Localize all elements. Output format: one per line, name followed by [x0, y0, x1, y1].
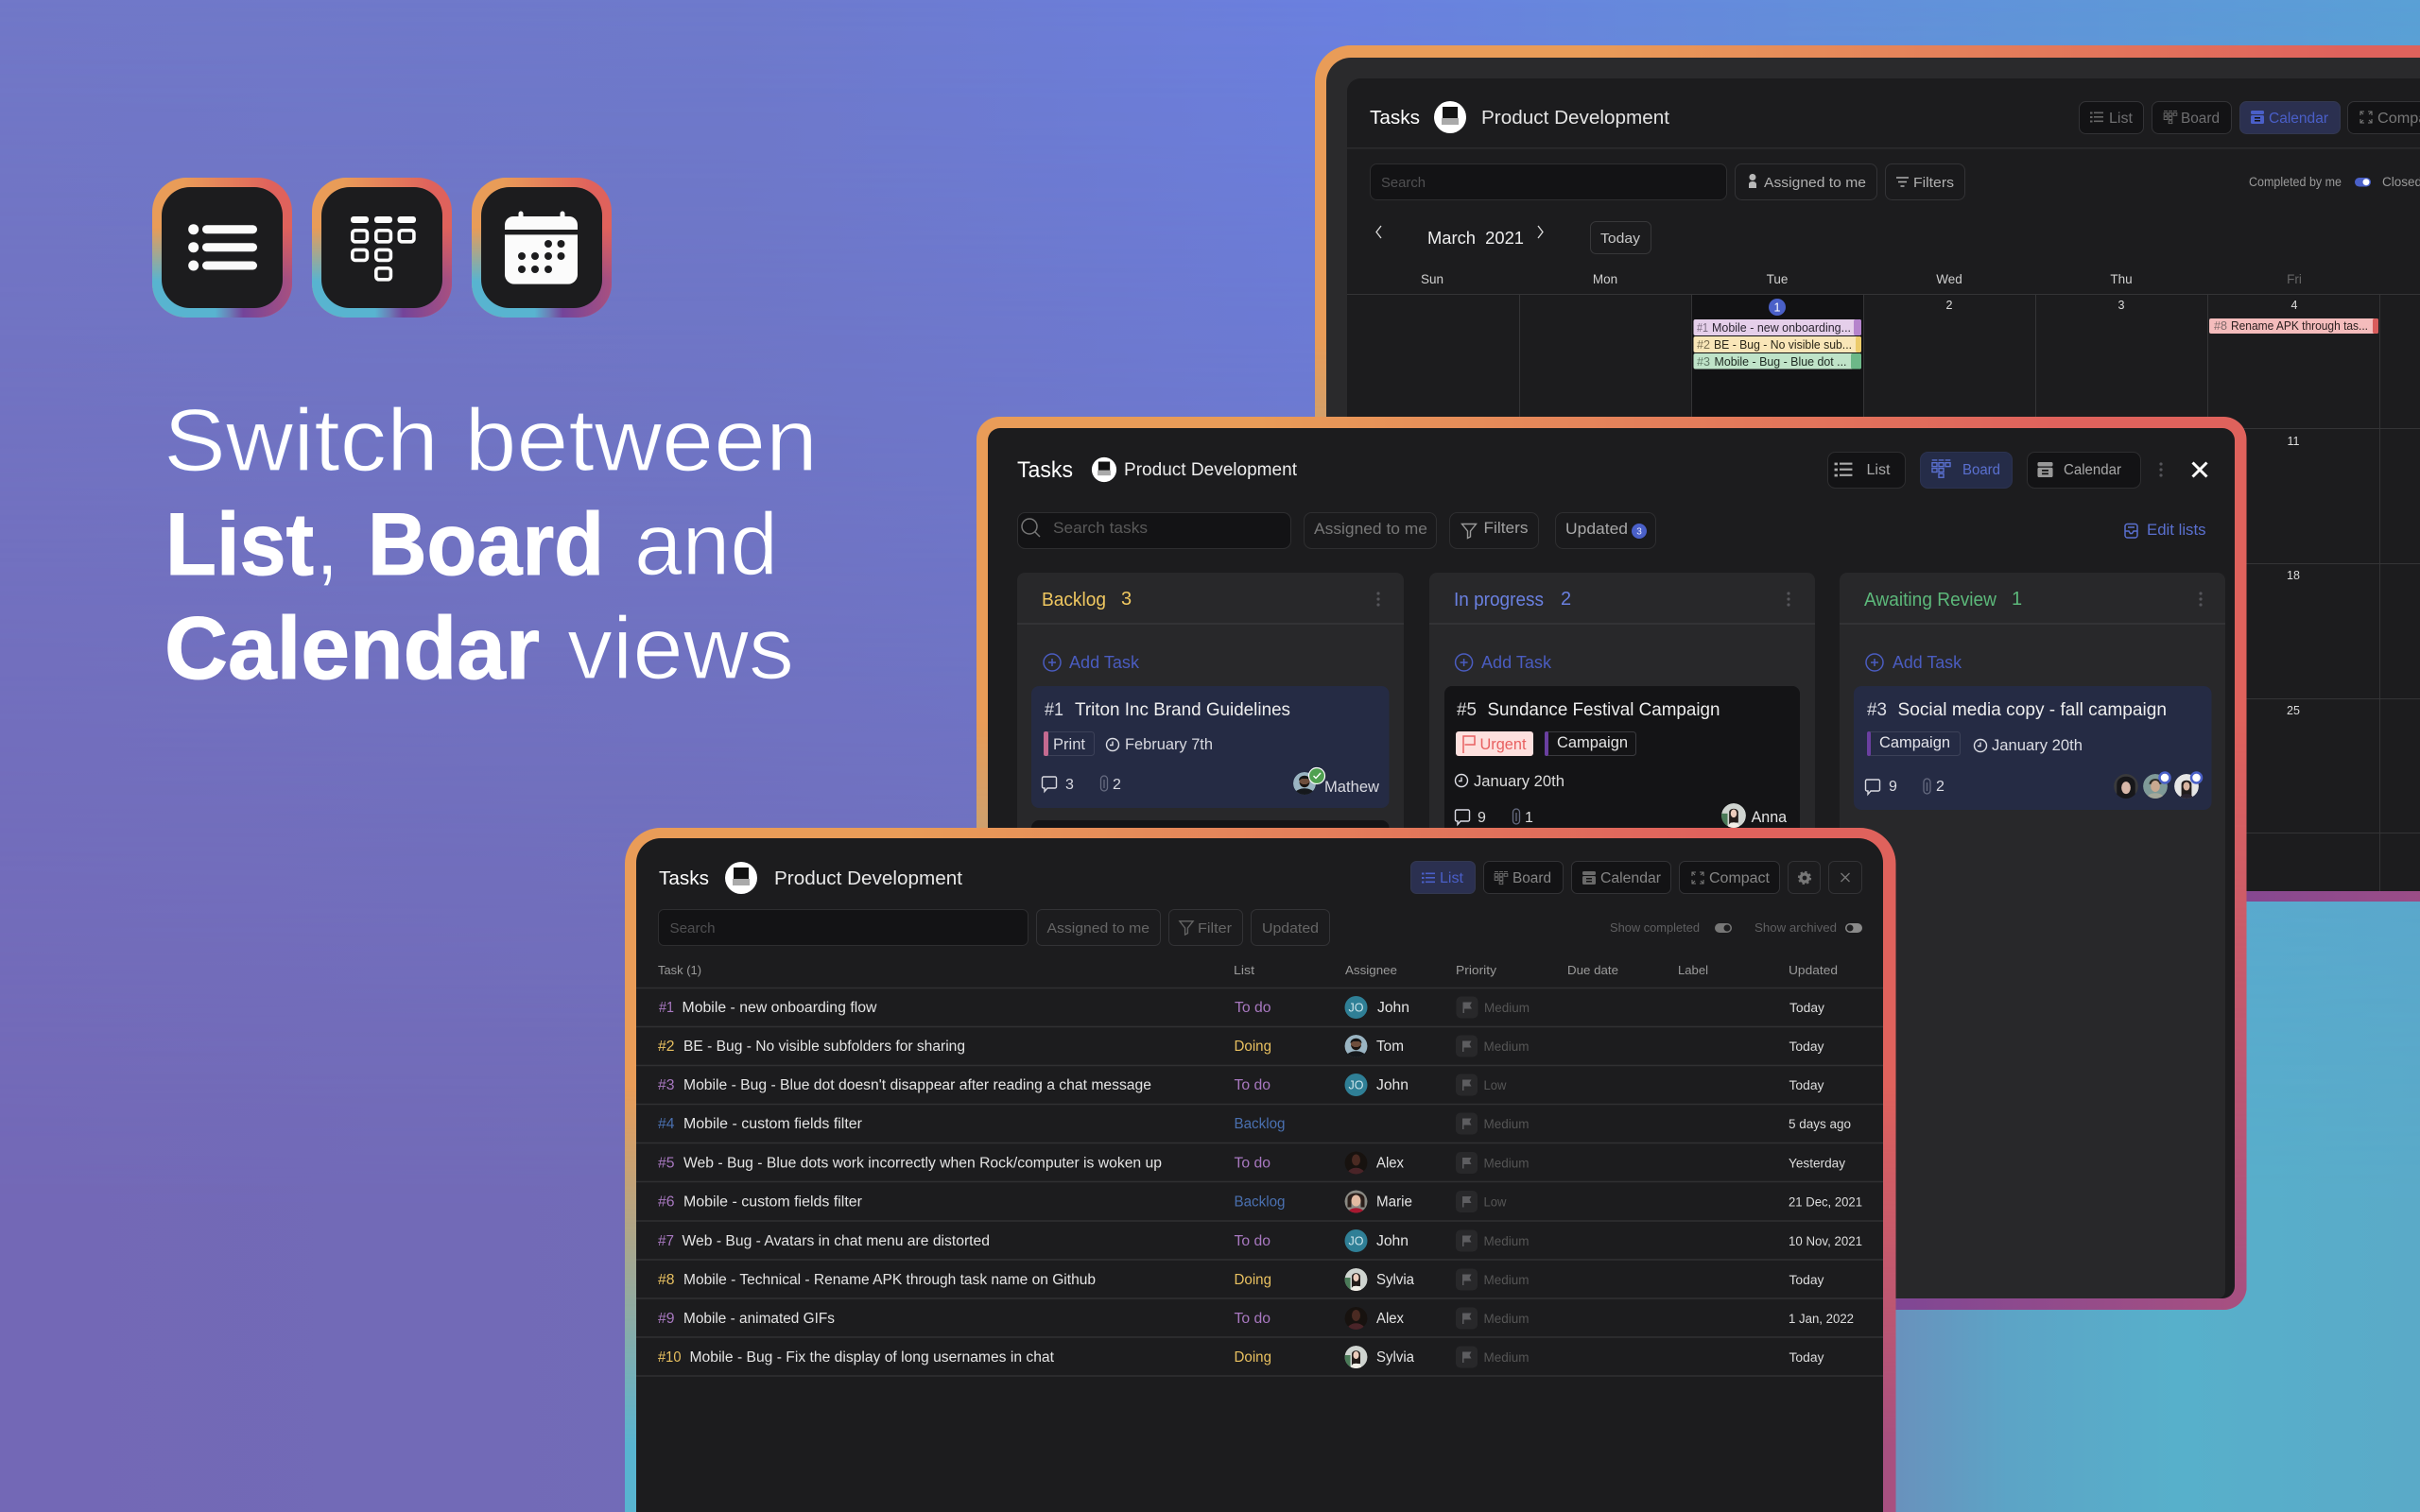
task row 10: Today: [1789, 1350, 1824, 1365]
panel: board view window: [977, 417, 2246, 1310]
calendar task chip 2: BE - Bug - No visible sub...: [1714, 338, 1852, 352]
task row 5: #5: [658, 1155, 675, 1172]
calendar weekday headers: Fri: [2287, 272, 2302, 286]
task row 7: 10 Nov, 2021: [1789, 1234, 1862, 1248]
card: Triton Inc Brand Guidelines: February 7th: [1125, 735, 1213, 753]
calendar task chip 3: #3: [1697, 355, 1710, 369]
board column: backlog: Add Task: [1069, 653, 1140, 672]
task row 3: [658, 1074, 1824, 1096]
title: Calendar: [164, 598, 540, 697]
calendar day numbers: 3: [2118, 299, 2125, 312]
card: Triton Inc Brand Guidelines: 3: [1065, 777, 1074, 793]
calendar view buttons: [2080, 102, 2420, 134]
task row 10: Mobile - Bug - Fix the display of long usernames in chat: [690, 1349, 1055, 1366]
board column: awaiting review: [1840, 573, 2225, 1298]
task row 1: To do: [1235, 1000, 1270, 1016]
card: Sundance Festival Campaign: Sundance Festival Campaign: [1488, 699, 1720, 720]
task table header: Priority: [1456, 963, 1497, 977]
edit lists link: Edit lists: [2147, 521, 2206, 539]
panel: list view window: [625, 828, 1896, 1512]
task row 10: [658, 1346, 1824, 1368]
board search and filters: Filters: [1484, 519, 1528, 537]
card: Sundance Festival Campaign: 9: [1478, 810, 1486, 826]
task row 1: Today: [1789, 1001, 1824, 1015]
panel: calendar view window: [1315, 45, 2420, 902]
board search and filters: Updated: [1565, 520, 1628, 538]
task row 4: Medium: [1484, 1117, 1530, 1131]
task row 10: Sylvia: [1376, 1349, 1414, 1366]
card: Triton Inc Brand Guidelines: Print: [1053, 735, 1085, 753]
task row 9: Mobile - animated GIFs: [683, 1311, 835, 1327]
title: [164, 390, 818, 697]
task row 8: Doing: [1235, 1272, 1271, 1288]
title: List: [165, 494, 314, 593]
card: Social media copy: 2: [1936, 779, 1945, 795]
list search and filters: Search: [669, 920, 715, 936]
card: Social media copy: Campaign: [1879, 733, 1950, 751]
task row 8: Sylvia: [1376, 1272, 1414, 1288]
calendar month navigation: [1376, 221, 1651, 253]
calendar task chip 3: [1694, 353, 1861, 369]
calendar view buttons: Board: [2181, 111, 2220, 127]
card: Social media copy: [1854, 686, 2212, 810]
calendar header: Product Development: [1481, 108, 1669, 129]
task row 10: Medium: [1484, 1350, 1530, 1365]
task row 6: [658, 1191, 1862, 1213]
task row 3: John: [1376, 1077, 1409, 1093]
calendar task chip 8: Rename APK through tas...: [2231, 319, 2368, 333]
task row 8: #8: [658, 1272, 675, 1288]
task row 5: Yesterday: [1789, 1157, 1845, 1170]
table row dividers: [636, 988, 1883, 1376]
board header: Product Development: [1124, 460, 1298, 480]
task row 7: #7: [658, 1233, 674, 1249]
task row 3: Low: [1484, 1078, 1507, 1092]
task row 5: To do: [1235, 1155, 1270, 1172]
calendar search and filters: Search: [1381, 175, 1426, 191]
calendar search and filters: Assigned to me: [1764, 175, 1866, 191]
task row 6: Backlog: [1235, 1194, 1286, 1210]
task row 10: #10: [658, 1349, 682, 1366]
task row 2: Doing: [1235, 1039, 1271, 1055]
task row 2: [658, 1035, 1824, 1057]
board column: awaiting review: Add Task: [1893, 653, 1962, 672]
board view buttons: Calendar: [2064, 462, 2121, 478]
task row 7: [658, 1229, 1862, 1252]
task row 5: Web - Bug - Blue dots work incorrectly when Rock/computer is woken up: [683, 1155, 1162, 1172]
task row 3: #3: [658, 1077, 675, 1093]
calendar toggles: Completed by me: [2249, 175, 2342, 189]
task row 3: Today: [1789, 1078, 1824, 1092]
task row 4: [658, 1113, 1851, 1134]
task row 8: Today: [1789, 1273, 1824, 1287]
card: Sundance Festival Campaign: [1444, 686, 1800, 866]
task row 9: 1 Jan, 2022: [1789, 1312, 1854, 1326]
task row 7: JO: [1349, 1234, 1364, 1247]
list search and filters: Filter: [1198, 920, 1232, 936]
task row 2: Today: [1789, 1040, 1824, 1054]
board view buttons: [1828, 452, 2206, 488]
task row 3: To do: [1235, 1077, 1270, 1093]
task row 1: John: [1377, 1000, 1409, 1016]
task row 2: BE - Bug - No visible subfolders for sharing: [683, 1039, 965, 1055]
list header: [659, 862, 962, 894]
list search and filters: [658, 909, 1329, 945]
card: Triton Inc Brand Guidelines: [1031, 686, 1390, 808]
calendar day numbers: 25: [2287, 704, 2300, 717]
task row 9: To do: [1235, 1311, 1270, 1327]
task row 8: Medium: [1484, 1273, 1530, 1287]
board search and filters: 3: [1636, 527, 1642, 537]
board header: [1017, 457, 1298, 483]
task row 8: [658, 1268, 1824, 1291]
card: Sundance Festival Campaign: #5: [1457, 699, 1477, 720]
calendar search and filters: Filters: [1913, 175, 1954, 191]
calendar weekday headers: Tue: [1767, 272, 1788, 286]
list toggles: Show archived: [1754, 920, 1837, 935]
card: Social media copy: Social media copy - fall campaign: [1898, 699, 2167, 720]
card: Triton Inc Brand Guidelines: Triton Inc Brand Guidelines: [1075, 699, 1290, 720]
calendar day numbers: 11: [2288, 435, 2300, 448]
board column: awaiting review: Awaiting Review: [1864, 590, 1997, 610]
task row 7: To do: [1235, 1233, 1270, 1249]
task row 1: #1: [659, 1000, 674, 1016]
icon: calendar view: [472, 178, 612, 318]
task row 7: John: [1376, 1233, 1409, 1249]
task row 6: Low: [1484, 1194, 1507, 1210]
task row 7: Medium: [1484, 1234, 1530, 1248]
task row 4: Backlog: [1235, 1116, 1286, 1132]
card: Sundance Festival Campaign: Urgent: [1480, 735, 1527, 753]
calendar day numbers: [1774, 299, 2300, 717]
calendar header: [1347, 101, 2420, 149]
calendar task chip 8: #8: [2214, 319, 2227, 333]
board view buttons: Board: [1962, 462, 2000, 478]
card: Social media copy: January 20th: [1992, 736, 2083, 754]
task row 3: JO: [1349, 1079, 1364, 1092]
list search and filters: Updated: [1262, 920, 1319, 936]
list toggles: Show completed: [1610, 920, 1700, 935]
list toggles: [1610, 920, 1862, 935]
task row 9: Medium: [1484, 1312, 1530, 1326]
card: Sundance Festival Campaign: Anna: [1752, 808, 1788, 826]
board column: awaiting review: 1: [2012, 589, 2022, 610]
task row 6: #6: [658, 1194, 675, 1210]
list header: Tasks: [659, 868, 709, 889]
task table header: [658, 963, 1838, 977]
task table header: Due date: [1567, 963, 1618, 977]
card: Triton Inc Brand Guidelines: Mathew: [1324, 778, 1380, 796]
task row 2: #2: [658, 1039, 675, 1055]
list header: Product Development: [774, 868, 962, 889]
board column: backlog: Backlog: [1042, 590, 1106, 610]
card: Sundance Festival Campaign: 1: [1525, 810, 1533, 826]
calendar task chip 1: Mobile - new onboarding...: [1712, 321, 1851, 335]
task table header: List: [1234, 963, 1254, 977]
list view buttons: List: [1440, 870, 1464, 886]
calendar weekday headers: Mon: [1593, 272, 1617, 286]
task table header: Label: [1678, 963, 1708, 977]
task row 1: [659, 996, 1824, 1019]
calendar task chip 3: Mobile - Bug - Blue dot ...: [1715, 355, 1847, 369]
board header: Tasks: [1017, 457, 1073, 483]
board column: backlog: [1017, 573, 1404, 1298]
task row 4: Mobile - custom fields filter: [683, 1116, 862, 1132]
task row 4: 5 days ago: [1789, 1117, 1851, 1131]
task row 5: [658, 1151, 1845, 1174]
task row 2: Tom: [1376, 1039, 1404, 1055]
task row 5: Medium: [1484, 1157, 1530, 1170]
task row 2: Medium: [1484, 1040, 1530, 1054]
calendar weekday headers: Thu: [2110, 272, 2133, 286]
calendar task chip 1: #1: [1697, 321, 1708, 335]
task row 9: Alex: [1376, 1311, 1404, 1327]
task row 9: #9: [658, 1311, 675, 1327]
task row 1: Mobile - new onboarding flow: [683, 1000, 877, 1016]
list view buttons: Calendar: [1600, 870, 1661, 886]
task row 10: Doing: [1235, 1349, 1271, 1366]
title: Switch between: [164, 390, 818, 490]
list view buttons: [1410, 862, 1862, 894]
task row 1: JO: [1349, 1002, 1364, 1015]
icon: list view: [152, 178, 292, 318]
task row 8: Mobile - Technical - Rename APK through task name on Github: [683, 1272, 1096, 1288]
list search and filters: Assigned to me: [1047, 920, 1150, 936]
board column: in progress: Add Task: [1481, 653, 1552, 672]
task row 9: [658, 1307, 1854, 1330]
board search and filters: Assigned to me: [1314, 520, 1427, 538]
card: Triton Inc Brand Guidelines: #1: [1045, 699, 1063, 720]
board column: in progress: In progress: [1454, 590, 1544, 610]
task row 6: Mobile - custom fields filter: [683, 1194, 862, 1210]
calendar header: Tasks: [1370, 108, 1420, 129]
task row 6: 21 Dec, 2021: [1789, 1194, 1862, 1210]
task table header: Updated: [1789, 963, 1838, 977]
calendar month navigation: Today: [1600, 231, 1641, 247]
calendar weekday headers: [1421, 272, 2302, 286]
icon: board view: [312, 178, 452, 318]
calendar day numbers: 4: [2291, 299, 2298, 312]
calendar month navigation: March 2021: [1427, 229, 1524, 248]
card below: [1031, 820, 1390, 877]
calendar search and filters: [1371, 164, 1964, 200]
card: Triton Inc Brand Guidelines: 2: [1113, 777, 1121, 793]
calendar weekday headers: Sun: [1421, 272, 1443, 286]
card: Social media copy: #3: [1867, 699, 1887, 720]
board view buttons: List: [1866, 462, 1891, 478]
calendar grid: [1347, 294, 2420, 891]
task row 6: Marie: [1376, 1194, 1412, 1210]
task row 3: Mobile - Bug - Blue dot doesn't disappear after reading a chat message: [683, 1077, 1151, 1093]
calendar task chip 2: [1694, 336, 1861, 352]
calendar day numbers: 18: [2287, 569, 2300, 582]
calendar weekday headers: Wed: [1936, 272, 1962, 286]
calendar view buttons: Calendar: [2269, 111, 2328, 127]
board column: in progress: [1429, 573, 1815, 1298]
list view buttons: Compact: [1709, 870, 1771, 886]
board search and filters: Search tasks: [1053, 519, 1148, 537]
title: Board: [368, 494, 604, 593]
task row 1: Medium: [1484, 1001, 1530, 1015]
board column: backlog: 3: [1121, 589, 1132, 610]
task table header: Assignee: [1345, 963, 1397, 977]
calendar day numbers: 2: [1946, 299, 1953, 312]
card: Sundance Festival Campaign: January 20th: [1474, 772, 1564, 790]
title: and: [634, 494, 778, 593]
calendar task chip 1: [1694, 319, 1861, 335]
card: Social media copy: 9: [1889, 779, 1897, 795]
board column: in progress: 2: [1561, 589, 1571, 610]
calendar task chip 2: #2: [1697, 338, 1710, 352]
calendar view buttons: List: [2109, 111, 2134, 127]
task row 4: #4: [658, 1116, 675, 1132]
calendar toggles: [2249, 175, 2420, 189]
card: Sundance Festival Campaign: Campaign: [1557, 733, 1628, 751]
board search and filters: [1017, 512, 1656, 548]
calendar day numbers: 1: [1774, 301, 1781, 314]
task table header: Task (1): [658, 963, 701, 977]
task row 5: Alex: [1376, 1155, 1404, 1172]
list view buttons: Board: [1512, 870, 1551, 886]
task row 7: Web - Bug - Avatars in chat menu are distorted: [683, 1233, 990, 1249]
title: views: [567, 598, 794, 697]
title: ,: [315, 494, 339, 593]
